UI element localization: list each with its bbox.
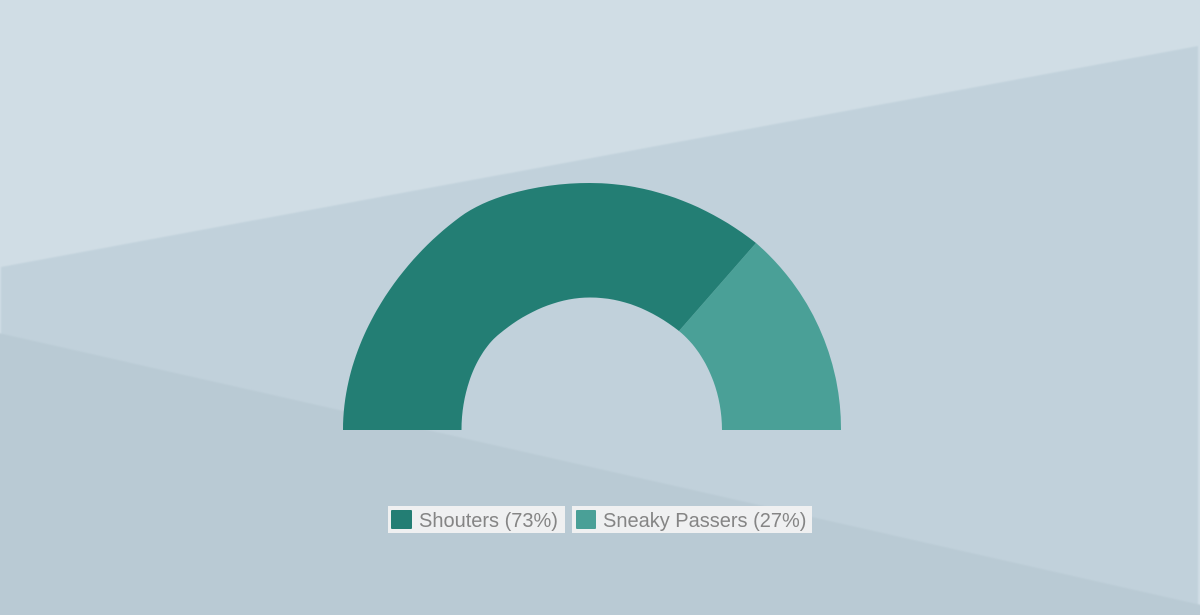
- legend: [388, 506, 812, 533]
- segment: Sneaky Passers 27%: [679, 243, 841, 430]
- segment: Shouters 73%: [343, 183, 756, 430]
- legend item: Sneaky Passers: Sneaky Passers (27%): [603, 510, 806, 532]
- half-doughnut chart: [343, 183, 841, 430]
- legend item: Shouters: Shouters (73%): [419, 510, 558, 532]
- legend item: Sneaky Passers: [572, 506, 812, 533]
- legend item: Shouters: [388, 506, 565, 533]
